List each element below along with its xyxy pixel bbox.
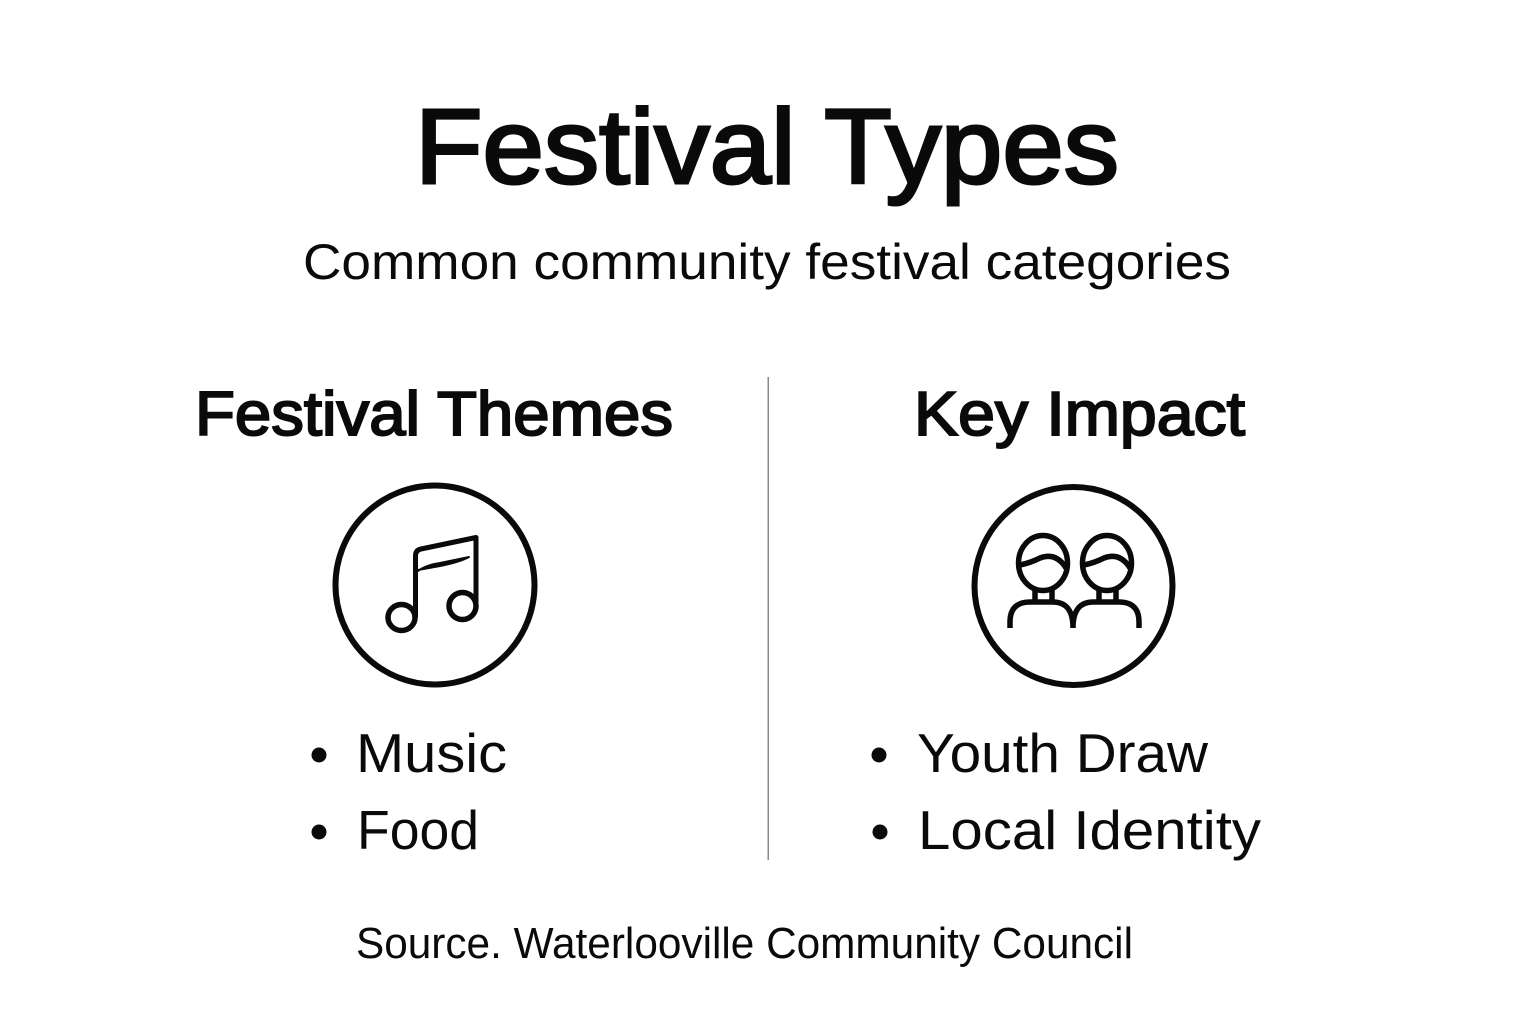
- list: festival themes: [312, 722, 507, 861]
- source note: Source. Waterlooville Community Council: [356, 919, 1133, 968]
- list: key impact: [872, 722, 1262, 861]
- list: festival themes: Food: [357, 799, 479, 861]
- icon: music note in circle: [336, 486, 534, 684]
- heading: festival themes: Festival Themes: [195, 380, 673, 449]
- panel: key impact: [872, 380, 1262, 861]
- list: key impact: Youth Draw: [917, 722, 1208, 784]
- list: festival themes: Music: [356, 722, 507, 784]
- title: Festival Types: [415, 88, 1119, 206]
- subtitle: Common community festival categories: [303, 234, 1231, 290]
- list: key impact: Local Identity: [918, 799, 1262, 861]
- panel: festival themes: [195, 380, 673, 861]
- heading: key impact: Key Impact: [914, 380, 1245, 449]
- icon: two people in circle: [974, 487, 1172, 685]
